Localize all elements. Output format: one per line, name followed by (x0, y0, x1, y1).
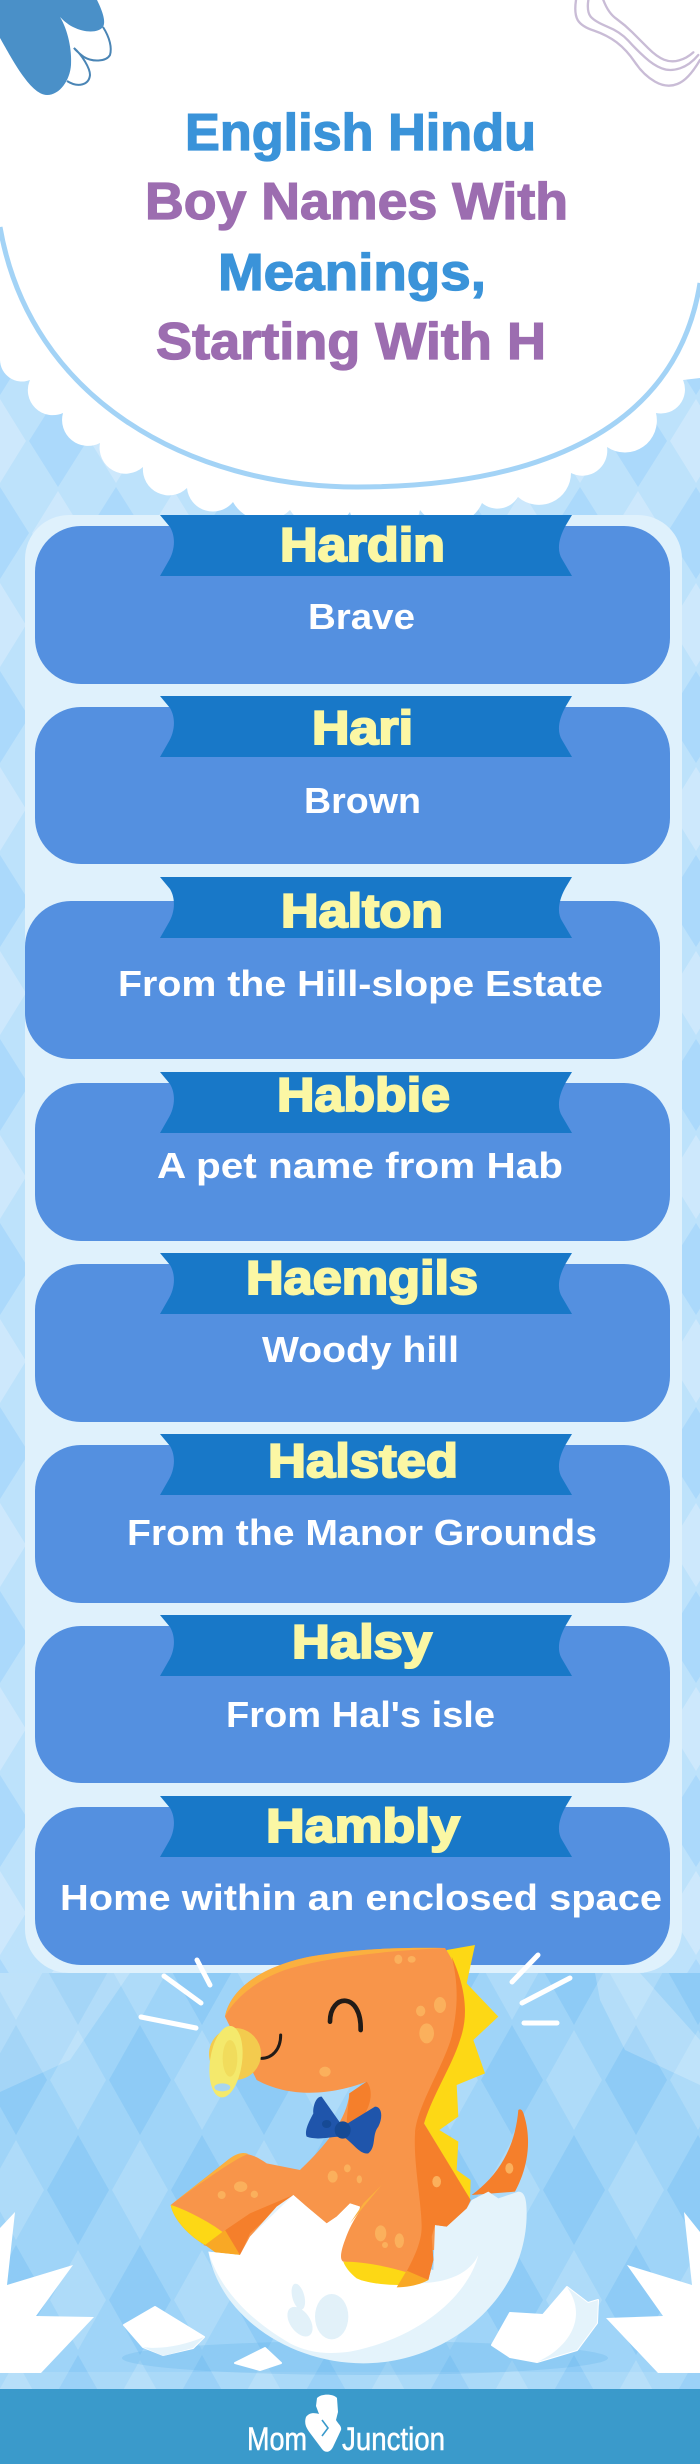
dino chin shading (347, 2082, 371, 2123)
dino head highlight (225, 1948, 445, 2017)
title: Boy Names With (145, 173, 568, 231)
card: Hambly (35, 1796, 670, 1965)
card: Habbie (35, 1068, 670, 1241)
dino arm (171, 2153, 293, 2255)
card: Hambly: Home within an enclosed space (60, 1877, 662, 1918)
card: Haemgils (35, 1251, 670, 1422)
title (145, 104, 568, 371)
card: Halsted: From the Manor Grounds (127, 1512, 597, 1553)
panel: names list backing (25, 515, 682, 1973)
footer band (0, 2389, 700, 2464)
card: Hardin: Hardin (280, 518, 445, 571)
icon: lilac wavy lines corner (575, 0, 700, 86)
scalloped white title circle (0, 0, 700, 539)
card: Hambly: Hambly (266, 1799, 460, 1852)
card: Hardin (35, 515, 670, 684)
card: Habbie: Habbie (277, 1068, 450, 1121)
card: Halsy (35, 1615, 670, 1783)
MomJunction logo: Mom (247, 2421, 307, 2457)
shell fragments (124, 2287, 598, 2370)
dino spikes (424, 1945, 498, 2200)
card: Hari (35, 696, 670, 864)
card: Halton: Halton (281, 884, 443, 937)
card: Haemgils: Woody hill (262, 1329, 459, 1370)
card: Hari: Hari (312, 701, 413, 754)
pacifier (205, 2024, 261, 2100)
egg shadow (122, 2341, 608, 2375)
card: Habbie: A pet name from Hab (157, 1145, 563, 1186)
sparkle lines (141, 1955, 570, 2028)
card: Hari: Brown (304, 780, 421, 821)
dino skin speckles (218, 1955, 513, 2248)
card: Hardin: Brave (308, 596, 415, 637)
illustration: baby dinosaur hatching from egg (171, 1945, 528, 2363)
egg shell (208, 2192, 527, 2363)
dino leg (341, 2123, 471, 2287)
card: Halsted (35, 1434, 670, 1603)
card: Halsted: Halsted (268, 1434, 458, 1487)
dino tail (472, 2109, 528, 2195)
dino back shading (415, 1957, 465, 2133)
title: Starting With H (156, 313, 546, 371)
MomJunction logo: Junction (342, 2421, 445, 2457)
card: Halsy: Halsy (292, 1615, 432, 1668)
card: Halton: From the Hill-slope Estate (118, 963, 603, 1004)
title: English Hindu (185, 104, 536, 162)
dino body (171, 1948, 471, 2255)
white torn edges bottom (0, 2212, 700, 2373)
bow tie (306, 2097, 381, 2153)
icon: blue feather corner (0, 0, 111, 95)
circle ring (0, 227, 700, 487)
card: Halton (25, 877, 660, 1059)
title: Meanings, (218, 244, 486, 302)
card: Haemgils: Haemgils (246, 1251, 478, 1304)
MomJunction logo (247, 2395, 445, 2457)
dino eyes (262, 2001, 361, 2058)
card: Halsy: From Hal's isle (226, 1694, 495, 1735)
